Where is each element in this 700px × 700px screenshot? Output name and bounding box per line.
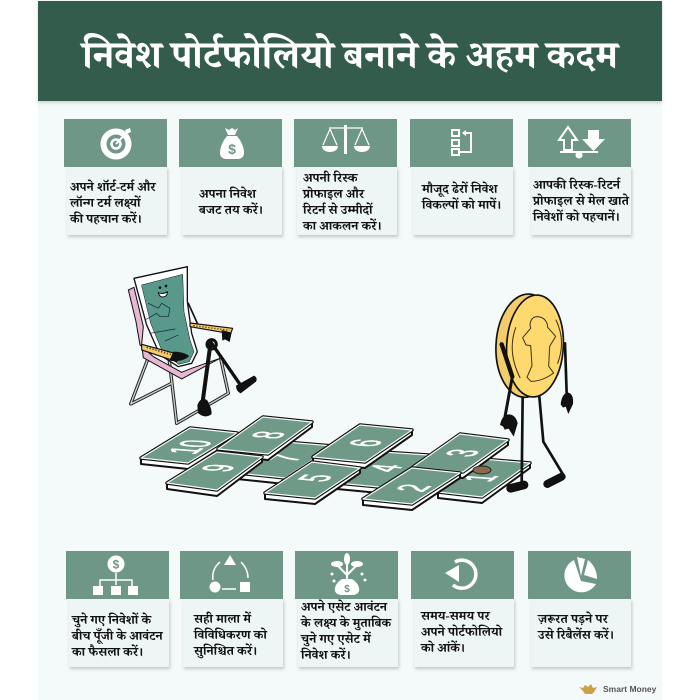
text: step 7 bbox=[193, 611, 268, 658]
panel: step 10 rebalance bbox=[528, 551, 634, 670]
tile 8 bbox=[218, 417, 312, 460]
arms and legs bbox=[169, 352, 189, 361]
tile 7 bbox=[237, 442, 333, 484]
tile 9: 9 bbox=[191, 463, 246, 473]
panel: step 6 allocation bbox=[66, 551, 172, 670]
icon: shapes cycle bbox=[210, 555, 250, 592]
tile 2: 2 bbox=[386, 483, 441, 493]
text: step 10: उसे रिबैलेंस करें। bbox=[538, 627, 614, 642]
text: step 7: विविधिकरण को bbox=[194, 627, 267, 642]
title: निवेश पोर्टफोलियो बनाने के अहम कदम bbox=[82, 34, 618, 77]
stone marker bbox=[473, 466, 491, 474]
tile 9 bbox=[167, 452, 262, 496]
text: step 2: अपना निवेश bbox=[199, 186, 256, 201]
tile 6 bbox=[313, 425, 412, 468]
text: step 7: सुनिश्चित करें। bbox=[194, 643, 257, 658]
text: step 3: अपनी रिस्क bbox=[303, 170, 358, 185]
text: step 10: ज़रूरत पड़ने पर bbox=[538, 611, 608, 626]
text: step 5 bbox=[532, 177, 630, 224]
panel: step 3 risk profile bbox=[294, 119, 400, 238]
tile 7: 7 bbox=[258, 453, 313, 463]
text: step 3: प्रोफाइल और bbox=[303, 186, 364, 201]
text: step 6: बीच पूँजी के आवंटन bbox=[72, 628, 163, 643]
chair legs bbox=[131, 353, 228, 423]
icon: money bag: $ bbox=[228, 141, 236, 157]
panel: step 5 matching bbox=[528, 119, 634, 238]
text: step 8: निवेश करें। bbox=[301, 647, 351, 662]
icon: logo emblem bbox=[579, 684, 597, 694]
text: step 5: आपकी रिस्क-रिटर्न bbox=[533, 177, 620, 192]
near arm bbox=[502, 344, 512, 377]
tile 8: 8 bbox=[241, 430, 296, 440]
tile 1: 1 bbox=[453, 473, 508, 483]
text: step 6: चुने गए निवेशों के bbox=[72, 612, 151, 627]
legs bbox=[522, 397, 563, 485]
character: gold coin bbox=[493, 292, 573, 488]
logo: Smart Money bbox=[579, 684, 656, 694]
tile 3 bbox=[413, 434, 508, 478]
tile 6: 6 bbox=[338, 438, 393, 448]
icon: org tree with dollar: $ bbox=[113, 558, 120, 572]
icon: money plant bag bbox=[330, 553, 366, 595]
text: step 1: की पहचान करें। bbox=[70, 211, 142, 226]
tile 4: 4 bbox=[358, 463, 413, 473]
tile 10: 10 bbox=[158, 439, 223, 455]
text: step 3: रिटर्न से उम्मीदों bbox=[303, 202, 372, 217]
text: step 8: अपने एसेट आवंटन bbox=[301, 599, 387, 614]
text: step 2: बजट तय करें। bbox=[199, 202, 263, 217]
tile 4 bbox=[337, 452, 428, 494]
icon: pie chart bbox=[564, 557, 597, 592]
coin figure bbox=[523, 317, 556, 381]
panel: step 7 diversification bbox=[180, 551, 286, 670]
paper markings bbox=[145, 303, 178, 341]
face bbox=[158, 285, 168, 297]
tile 3: 3 bbox=[435, 448, 490, 458]
icon: balance scales bbox=[322, 125, 370, 154]
tile 2 bbox=[363, 468, 460, 510]
title bbox=[38, 1, 662, 101]
icon: circular arrow bbox=[445, 558, 478, 590]
character: portfolio paper on chair bbox=[128, 267, 257, 423]
text: step 6: का फैसला करें। bbox=[72, 644, 143, 659]
text: step 4 bbox=[421, 181, 501, 212]
text: step 4: विकल्पों को मापें। bbox=[422, 197, 501, 212]
brand name: Smart Money bbox=[603, 684, 656, 694]
text: step 8: के लक्ष्य के मुताबिक bbox=[301, 615, 391, 630]
panel: step 8 investing bbox=[295, 551, 400, 670]
icon: option flow bbox=[451, 129, 472, 156]
tile 10 bbox=[141, 428, 237, 469]
paper body bbox=[134, 267, 197, 367]
hopscotch grid bbox=[141, 417, 530, 510]
text: step 9 bbox=[420, 608, 503, 655]
icon: target bbox=[100, 128, 132, 160]
far arm bbox=[565, 343, 567, 393]
panel: step 1 goals bbox=[64, 119, 170, 238]
text: step 1: लॉन्ग टर्म लक्ष्यों bbox=[70, 195, 140, 210]
arm rests bbox=[142, 344, 178, 362]
text: step 5: निवेशों को पहचानें। bbox=[533, 209, 620, 224]
tile 5: 5 bbox=[288, 473, 343, 483]
tile 5 bbox=[265, 462, 360, 504]
tile 1 bbox=[438, 459, 530, 503]
text: step 1 bbox=[69, 179, 156, 226]
text: step 9: समय-समय पर bbox=[421, 608, 490, 623]
icon: up and down arrows on a balance bbox=[557, 125, 605, 158]
text: step 3 bbox=[302, 170, 382, 233]
text: step 4: मौजूद ढेरों निवेश bbox=[422, 181, 497, 196]
text: step 8 bbox=[300, 599, 392, 662]
icon: money plant bag: $ bbox=[344, 584, 350, 595]
panel: step 2 budget bbox=[179, 119, 284, 238]
panel: step 4 options bbox=[410, 119, 516, 238]
coin rim bbox=[493, 292, 560, 399]
coin face bbox=[504, 294, 566, 398]
text: step 1: अपने शॉर्ट-टर्म और bbox=[70, 179, 156, 194]
text: step 6 bbox=[71, 612, 164, 659]
panel: step 9 review bbox=[411, 551, 516, 670]
chair fabric bbox=[128, 287, 220, 379]
text: step 5: प्रोफाइल से मेल खाते bbox=[533, 193, 629, 208]
text: step 9: को आंकें। bbox=[421, 640, 465, 655]
icon: org tree with dollar bbox=[93, 556, 138, 595]
text: step 8: चुने गए एसेट में bbox=[301, 631, 371, 646]
text: step 3: का आकलन करें। bbox=[303, 218, 382, 233]
text: step 9: अपने पोर्टफोलियो bbox=[421, 624, 502, 639]
text: step 10 bbox=[537, 611, 614, 642]
icon: money bag bbox=[220, 128, 244, 159]
text: step 7: सही माला में bbox=[194, 611, 251, 626]
text: step 2 bbox=[198, 186, 263, 217]
